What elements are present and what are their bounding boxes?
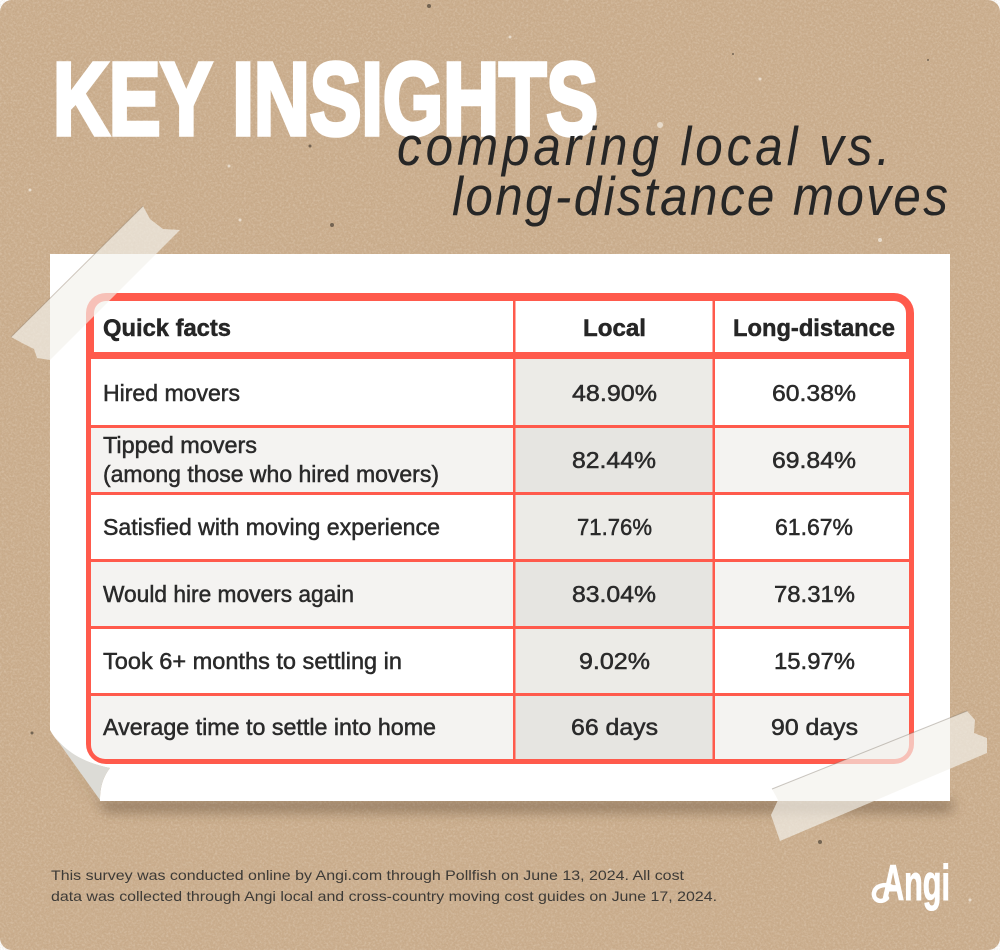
row: six months: Took 6+ months to settling in <box>103 648 402 674</box>
table header: Local <box>583 315 646 342</box>
table header: Long-distance <box>733 315 895 342</box>
footnote: data was collected through Angi local and cross-country moving cost guides on June 17, 2024. <box>51 888 717 904</box>
row: would hire again: 83.04% <box>572 581 656 607</box>
row: hired movers: 60.38% <box>772 380 856 406</box>
row: hired movers: 48.90% <box>572 380 657 406</box>
row: average time: Average time to settle into home <box>103 714 436 740</box>
paper card <box>50 254 955 812</box>
footnote <box>51 867 717 904</box>
row: hired movers <box>91 359 909 425</box>
row: satisfied: Satisfied with moving experience <box>103 514 440 540</box>
row: hired movers: Hired movers <box>103 380 240 406</box>
row: tipped movers: 69.84% <box>772 447 856 473</box>
row: average time: 90 days <box>771 714 858 740</box>
row: tipped movers: (among those who hired movers) <box>103 461 439 487</box>
subtitle: comparing local vs. <box>397 117 890 178</box>
tape: top left <box>11 206 180 360</box>
table header <box>94 301 906 352</box>
subtitle: long-distance moves <box>452 167 948 228</box>
logo: Angi: Angi <box>882 855 950 911</box>
row: tipped movers <box>91 428 909 492</box>
footnote: This survey was conducted online by Angi.com through Pollfish on June 13, 2024. All cost <box>51 867 684 883</box>
row: six months: 15.97% <box>774 648 855 674</box>
subtitle <box>397 117 948 228</box>
row: six months: 9.02% <box>579 648 650 674</box>
logo: Angi <box>874 855 950 911</box>
tape: bottom right <box>771 711 987 841</box>
table <box>86 293 914 764</box>
row: would hire again: Would hire movers again <box>103 581 354 607</box>
row: tipped movers: Tipped movers <box>103 432 257 458</box>
row: average time <box>91 696 909 759</box>
row: satisfied: 71.76% <box>577 514 652 540</box>
row: satisfied: 61.67% <box>775 514 853 540</box>
table header: Quick facts <box>103 315 231 342</box>
row: average time: 66 days <box>571 714 658 740</box>
row: six months <box>91 629 909 693</box>
title: KEY INSIGHTS <box>53 42 598 156</box>
row: satisfied <box>91 495 909 559</box>
row: would hire again <box>91 562 909 626</box>
row: tipped movers: 82.44% <box>572 447 656 473</box>
row: would hire again: 78.31% <box>774 581 855 607</box>
